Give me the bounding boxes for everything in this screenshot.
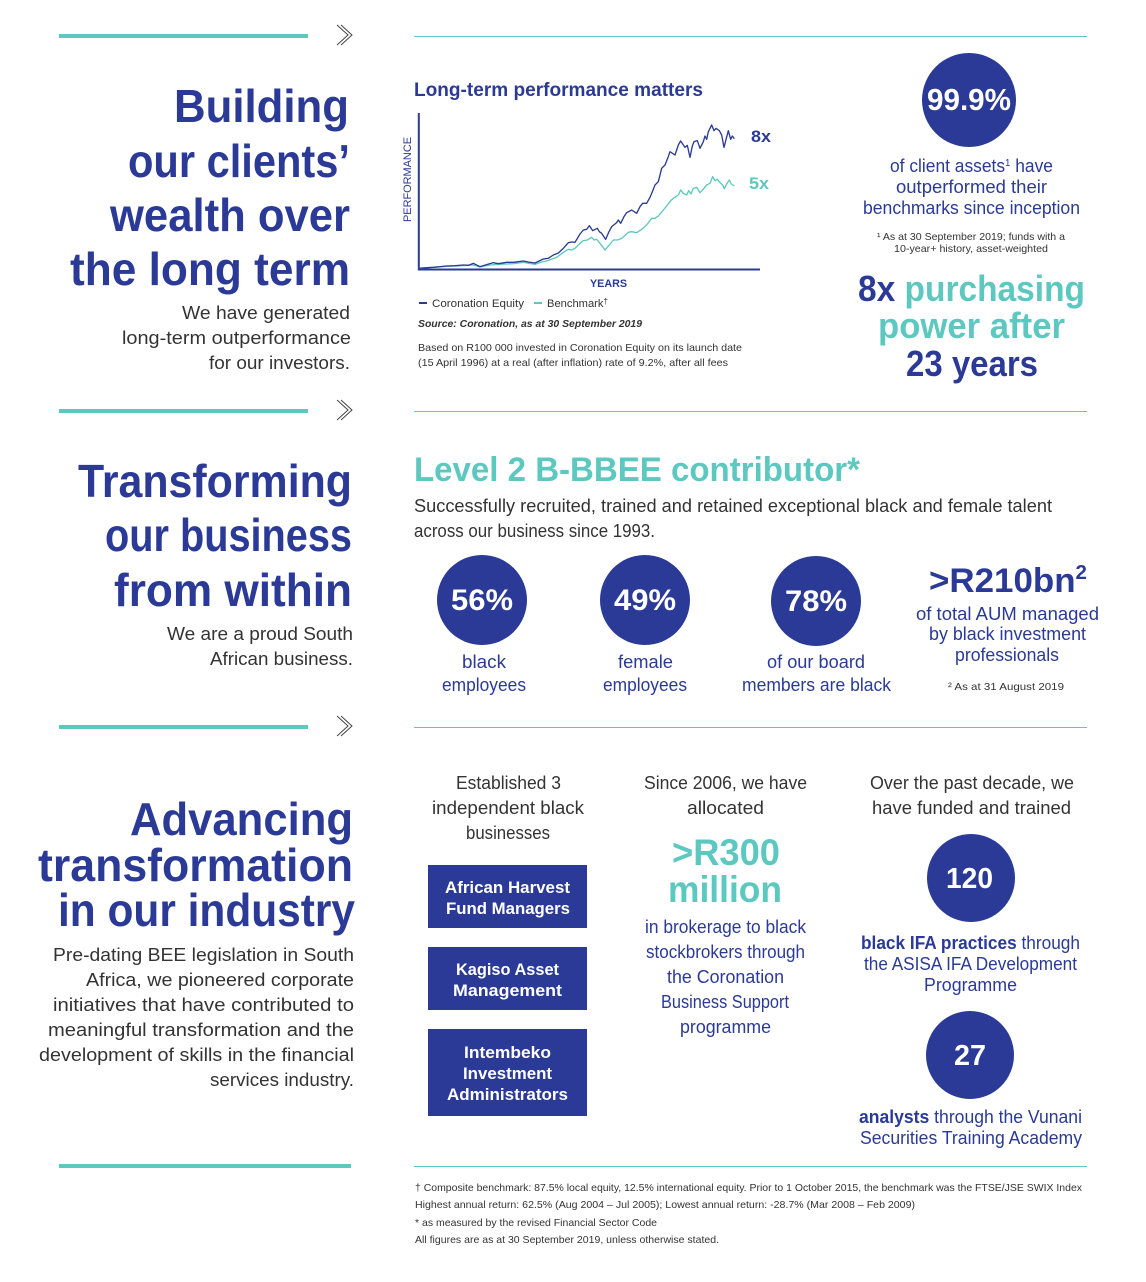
intro text: long-term outperformance	[122, 328, 351, 348]
stat: R210bn AUM	[916, 562, 1099, 693]
description: Established 3	[456, 773, 561, 793]
stat: 49% female employees: employees	[603, 675, 687, 695]
heading: advancing transformation: in our industry	[58, 884, 355, 936]
stat: R210bn AUM: >R210bn	[929, 562, 1072, 600]
description	[432, 773, 585, 843]
stat: 120 IFA practices: the ASISA IFA Development	[864, 954, 1077, 974]
box: African Harvest Fund Managers	[428, 865, 587, 928]
line chart: YEARS	[590, 278, 627, 290]
intro text: services industry.	[210, 1070, 354, 1090]
stat: 120 IFA practices: black IFA practices through	[861, 933, 1080, 953]
purchasing power callout: 23 years	[906, 343, 1038, 384]
stat: R300 million	[668, 832, 782, 910]
box: Kagiso Asset Management: Management	[453, 981, 562, 1000]
section bar and chevron	[59, 716, 352, 736]
chart title: Long-term performance matters	[414, 80, 703, 101]
stat footnote: ¹ As at 30 September 2019; funds with a	[877, 231, 1065, 243]
intro text	[122, 303, 351, 373]
box: Kagiso Asset Management: Kagiso Asset	[456, 960, 559, 979]
stat: R300 million: million	[668, 869, 782, 910]
stat: 49% female employees: 49%	[614, 584, 676, 617]
stat: 27 analysts: analysts through the Vunani	[859, 1107, 1082, 1127]
stat: R210bn AUM: 2	[1076, 562, 1087, 584]
panel: transforming our business intro	[59, 400, 353, 669]
chart source: Source: Coronation, as at 30 September 2019	[418, 318, 642, 330]
stat footnote	[877, 231, 1065, 255]
description	[644, 773, 807, 818]
stat: 56% black employees: black	[462, 652, 507, 672]
circle: 99.9%: 99.9%	[927, 82, 1011, 117]
panel: advancing transformation intro	[38, 716, 355, 1090]
description: have funded and trained	[872, 798, 1071, 818]
description: Over the past decade, we	[870, 773, 1074, 793]
stat: R300 million: >R300	[672, 832, 780, 873]
heading: building our clients' wealth	[70, 80, 350, 295]
stat: 49% female employees: female	[618, 652, 673, 672]
stat description	[863, 156, 1080, 218]
chart legend: Coronation Equity	[432, 298, 525, 310]
stat: R210bn AUM: ² As at 31 August 2019	[948, 681, 1064, 693]
panel: B-BBEE contributor	[414, 451, 1099, 695]
stat: 120 IFA practices: Programme	[924, 975, 1017, 995]
heading: building our clients' wealth: the long term	[70, 243, 350, 295]
description: allocated	[687, 798, 764, 818]
footnotes: Highest annual return: 62.5% (Aug 2004 – Jul 2005); Lowest annual return: -28.7% (Mar 2008 – Feb 2009)	[415, 1199, 915, 1211]
box: African Harvest Fund Managers: Fund Managers	[446, 899, 570, 918]
description: Successfully recruited, trained and retained exceptional black and female talent	[414, 496, 1052, 516]
box: Kagiso Asset Management	[428, 947, 587, 1010]
box: Intembeko Investment Administrators: Administrators	[447, 1085, 568, 1104]
series label: 5x: 5x	[749, 174, 770, 193]
stat description: the Coronation	[667, 967, 784, 987]
stat description: programme	[680, 1017, 771, 1037]
intro text: We are a proud South	[167, 624, 353, 644]
footnotes	[415, 1182, 1083, 1246]
description: Since 2006, we have	[644, 773, 807, 793]
footnotes: All figures are as at 30 September 2019, unless otherwise stated.	[415, 1234, 719, 1246]
box: Intembeko Investment Administrators	[428, 1029, 587, 1116]
stat: 56% black employees: employees	[442, 675, 526, 695]
line chart	[402, 113, 772, 290]
purchasing power callout: 8x purchasing	[858, 268, 1085, 309]
panel: independent black businesses	[428, 773, 587, 1116]
description: independent black	[432, 798, 585, 818]
panel: brokerage allocation	[644, 773, 807, 1037]
stat description: have	[1010, 156, 1053, 176]
stat: 78% board members: 78%	[785, 585, 847, 618]
stat description: outperformed their	[896, 177, 1047, 197]
panel: building clients' wealth intro	[59, 25, 352, 373]
box: African Harvest Fund Managers: African Harvest	[445, 878, 570, 897]
intro text: Africa, we pioneered corporate	[86, 970, 354, 990]
description	[870, 773, 1074, 818]
chart legend	[419, 297, 608, 310]
intro text	[167, 624, 353, 669]
heading: advancing transformation: transformation	[38, 839, 353, 891]
stat description: Business Support	[661, 992, 789, 1012]
intro text: African business.	[210, 649, 353, 669]
intro text	[39, 945, 354, 1090]
purchasing power callout: power after	[878, 305, 1065, 346]
heading: transforming our business	[78, 455, 352, 616]
intro text: development of skills in the financial	[39, 1045, 354, 1065]
chart legend: †	[603, 297, 608, 306]
box: Intembeko Investment Administrators: Investment	[463, 1064, 552, 1083]
stat: 27 analysts: Securities Training Academy	[860, 1128, 1082, 1148]
footnotes: * as measured by the revised Financial Sector Code	[415, 1217, 657, 1229]
stat: 27 analysts	[859, 1011, 1082, 1148]
heading: building our clients' wealth: our clients’	[128, 135, 350, 187]
stat: 78% board members: of our board	[767, 652, 865, 672]
purchasing power callout	[858, 268, 1085, 384]
chart note	[418, 342, 742, 369]
heading: advancing transformation	[38, 793, 355, 936]
heading: transforming our business: from within	[114, 564, 352, 616]
stat: R210bn AUM: professionals	[955, 645, 1059, 665]
line chart: PERFORMANCE	[402, 137, 414, 222]
heading: level 2 B-BBEE: Level 2 B-BBEE contributor*	[414, 451, 861, 489]
box: Intembeko Investment Administrators: Intembeko	[464, 1043, 551, 1062]
stat: 78% board members: members are black	[742, 675, 892, 695]
panel: long-term performance chart	[402, 80, 772, 369]
stat: R210bn AUM: by black investment	[929, 624, 1086, 644]
chart note: Based on R100 000 invested in Coronation Equity on its launch date	[418, 342, 742, 354]
section bar: bottom	[59, 1164, 351, 1168]
chart legend: Benchmark	[547, 298, 603, 310]
description: across our business since 1993.	[414, 521, 655, 541]
stat description: stockbrokers through	[646, 942, 805, 962]
stat description: 1	[1005, 158, 1011, 169]
stat description: of client assets	[890, 156, 1009, 176]
heading: advancing transformation: Advancing	[130, 793, 353, 845]
description	[414, 496, 1052, 541]
heading: transforming our business: Transforming	[78, 455, 352, 507]
series label: 8x: 8x	[751, 127, 772, 146]
panel: client assets stat	[858, 53, 1085, 384]
stat: 56% black employees: 56%	[451, 584, 513, 617]
stat: 120 IFA practices	[861, 834, 1080, 995]
description: businesses	[466, 823, 550, 843]
intro text: Pre-dating BEE legislation in South	[53, 945, 354, 965]
footnotes: † Composite benchmark: 87.5% local equity, 12.5% international equity. Prior to 1 October 2015, the benchmark was the FTSE/JSE SWIX Index	[415, 1182, 1083, 1194]
stat: R210bn AUM: of total AUM managed	[916, 604, 1099, 624]
stat description	[645, 917, 807, 1037]
panel: funded and trained	[859, 773, 1082, 1148]
heading: building our clients' wealth: Building	[174, 80, 349, 132]
stat description: benchmarks since inception	[863, 198, 1080, 218]
intro text: meaningful transformation and the	[48, 1020, 354, 1040]
stat: 78% board members	[742, 556, 892, 695]
intro text: for our investors.	[209, 353, 350, 373]
intro text: We have generated	[182, 303, 350, 323]
section bar and chevron	[59, 25, 352, 45]
heading: building our clients' wealth: wealth over	[109, 189, 350, 241]
circle: 99.9%	[922, 53, 1016, 147]
stat footnote: 10-year+ history, asset-weighted	[894, 243, 1048, 255]
section bar and chevron	[59, 400, 352, 420]
intro text: initiatives that have contributed to	[53, 995, 354, 1015]
stat description: in brokerage to black	[645, 917, 807, 937]
stat: 56% black employees	[437, 555, 527, 695]
stat: 27 analysts: 27	[954, 1040, 986, 1072]
heading: transforming our business: our business	[105, 509, 352, 561]
chart note: (15 April 1996) at a real (after inflation) rate of 9.2%, after all fees	[418, 357, 728, 369]
stat: 49% female employees	[600, 555, 690, 695]
stat: 120 IFA practices: 120	[946, 863, 993, 895]
